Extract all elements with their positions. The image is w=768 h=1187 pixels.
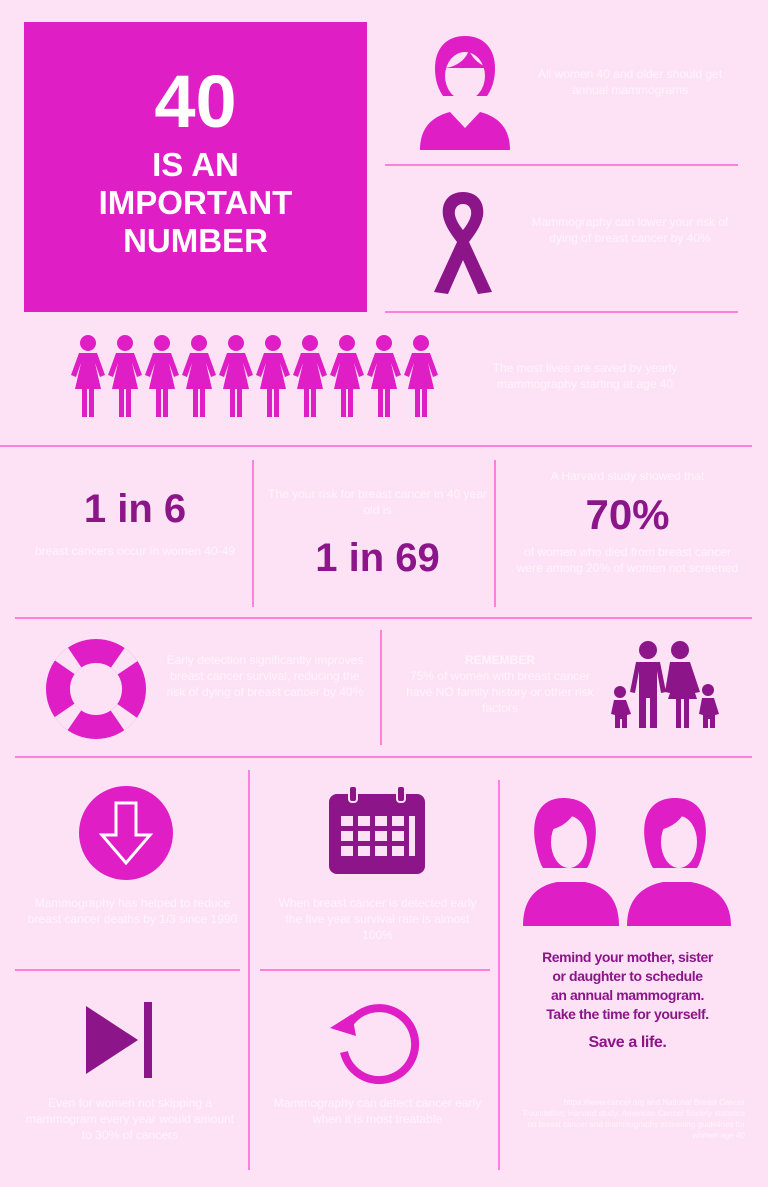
icon: ribbon	[434, 192, 492, 294]
text: remind callout: Remind your mother, sister	[542, 949, 713, 965]
title box: IMPORTANT	[99, 184, 292, 221]
icon: calendar	[329, 787, 425, 874]
text: remind callout: Save a life.	[589, 1034, 666, 1051]
title box: IS AN	[152, 146, 239, 183]
stat: 70%: A Harvard study showed that	[551, 469, 704, 483]
text: remind callout: an annual mammogram.	[551, 987, 704, 1003]
icon: two women	[523, 798, 731, 926]
stat: 1 in 6: 1 in 6	[84, 487, 186, 531]
text: sources: https://www.cancer.org and National Breast Cancer Foundation; Harvard study; American Cancer Society statistics on breast cancer and mammography screening guidelines for women age 40	[524, 1098, 745, 1140]
title box: NUMBER	[123, 222, 268, 259]
text: remember: 75% of women with breast cancer have NO family history or other risk factors	[406, 669, 594, 715]
stat: 70%: of women who died from breast cancer were among 20% of women not screened	[517, 545, 738, 575]
icon: family	[611, 641, 719, 728]
stat: 1 in 69: 1 in 69	[315, 536, 440, 580]
icon: lifebuoy	[46, 639, 146, 739]
text: remind callout: or daughter to schedule	[552, 968, 703, 984]
stat: 1 in 69: The your risk for breast cancer in 40 year old is	[268, 487, 487, 517]
text: lower risk: Mammography can lower your risk of dying of breast cancer by 40%	[532, 215, 728, 245]
icon: skip forward	[86, 1002, 152, 1078]
stat: 70%	[517, 469, 738, 575]
text: detect early: Mammography can detect cancer early when it is most treatable	[274, 1096, 481, 1126]
title box: 40	[154, 60, 237, 143]
text: remember: REMEMBER	[465, 653, 535, 667]
text: annual mammograms: All women 40 and older should get annual mammograms	[538, 67, 722, 97]
text: reduce deaths: Mammography has helped to reduce breast cancer deaths by 1/3 since 1990	[28, 896, 237, 926]
text: remind callout: Take the time for yourself.	[546, 1006, 709, 1022]
text: remind callout	[542, 949, 714, 1051]
icon: refresh circle	[330, 1004, 420, 1084]
title box	[24, 22, 367, 312]
stat: 1 in 6: breast cancers occur in women 40-49	[35, 544, 235, 558]
text: five year survival: When breast cancer is detected early the five year survival rate is almost 100%	[278, 896, 477, 942]
stat: 70%: 70%	[585, 491, 670, 538]
text: early detection: Early detection significantly improves breast cancer survival, reducing the risk of dying of breast cancer by 40%	[167, 653, 363, 699]
stat: 1 in 69	[268, 487, 487, 580]
text: skipping mammogram: Even for women not skipping a mammogram every year would amount to 30% of cancers	[26, 1096, 234, 1142]
text: most lives saved: The most lives are saved by yearly mammography starting at age 40	[493, 361, 677, 391]
icon: row of ten women	[71, 335, 438, 417]
icon: woman	[420, 36, 510, 150]
icon: down arrow circle	[79, 786, 173, 880]
stat: 1 in 6	[35, 487, 235, 558]
